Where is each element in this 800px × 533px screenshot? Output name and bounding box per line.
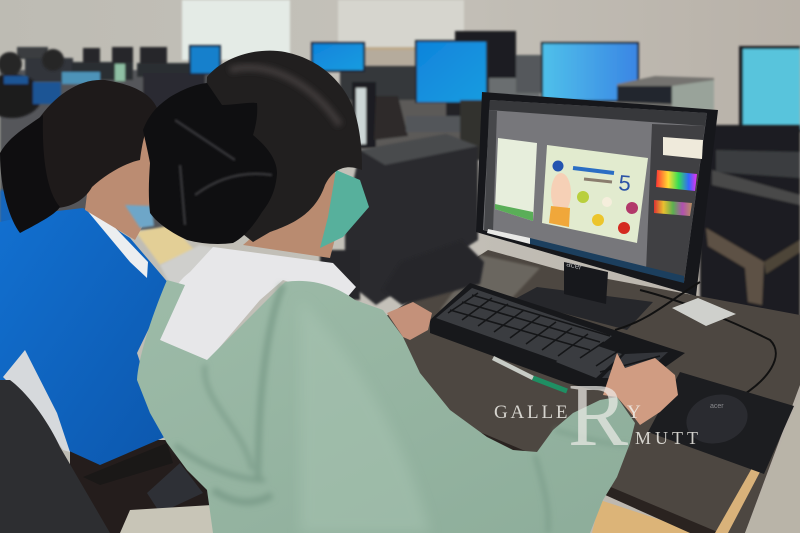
left student: blue jacket — [0, 208, 170, 465]
cables — [615, 282, 776, 400]
left student: neck and face — [85, 110, 160, 240]
main student: neck — [243, 167, 345, 258]
jacket white stripe — [3, 350, 70, 452]
navigator thumb — [663, 137, 703, 159]
main student: black bow scrunchie — [143, 83, 277, 244]
mouse: acer — [710, 403, 724, 410]
figure in artboard — [549, 160, 571, 227]
hood fold shading — [175, 285, 628, 533]
background: wall panels and projector screen — [182, 0, 464, 70]
monitor bezel — [476, 92, 718, 296]
monitor stand — [513, 262, 653, 330]
main student: face mask — [320, 170, 369, 248]
main student: sage hoodie — [137, 280, 635, 533]
number 5: 5 — [618, 170, 632, 196]
keyboard — [430, 283, 685, 390]
hood highlight — [300, 300, 430, 533]
main student: right hand — [603, 353, 678, 425]
main student: hair — [200, 51, 362, 242]
right side: rear desk and chair — [700, 125, 800, 320]
left tool strip — [484, 110, 497, 232]
brand: acer: acer — [566, 259, 583, 272]
watermark: Y: Y — [627, 402, 641, 423]
main artboard — [542, 145, 648, 243]
mouse — [681, 388, 753, 450]
screen gray canvas — [483, 100, 707, 282]
chair arm pad — [147, 463, 203, 513]
computer tower — [320, 134, 478, 305]
desk light patch near monitor — [440, 255, 540, 310]
fruit icons — [577, 191, 638, 234]
panel: monitor with design software — [476, 92, 718, 330]
app top bar — [489, 100, 707, 126]
mouse pad — [648, 372, 794, 474]
colour picker — [656, 170, 697, 191]
left student: face mask — [125, 205, 154, 228]
main student: left hand — [387, 302, 432, 340]
paper on desk — [160, 245, 226, 285]
foreground desk — [380, 250, 800, 533]
left student: hair scrunchie — [0, 115, 60, 233]
book on desk — [136, 225, 196, 265]
desk wooden front edge — [592, 500, 700, 533]
watermark: MUTT: MUTT — [635, 428, 702, 448]
artboard heading — [573, 168, 614, 182]
pencil case — [382, 240, 484, 305]
watermark — [494, 366, 702, 465]
chair arm rest — [83, 443, 173, 485]
usb hub — [672, 298, 736, 326]
shirt collar — [85, 208, 148, 278]
swatches — [654, 200, 692, 216]
main student: white shirt — [160, 247, 356, 362]
right tool panel — [646, 124, 705, 282]
watermark: GALLE: GALLE — [494, 402, 570, 423]
bag — [120, 505, 214, 533]
left artboard — [495, 138, 537, 221]
far-left student — [0, 49, 64, 266]
under-desk darkness at left — [70, 440, 210, 533]
desk side — [745, 395, 800, 533]
watermark: large R: R — [568, 366, 628, 465]
hair highlight — [230, 67, 340, 125]
left student: hair — [38, 80, 157, 208]
taskbar — [530, 238, 684, 283]
chair back — [0, 380, 110, 533]
background: rear desks and computers — [0, 31, 800, 230]
bow folds — [175, 120, 272, 225]
pen — [493, 358, 567, 391]
